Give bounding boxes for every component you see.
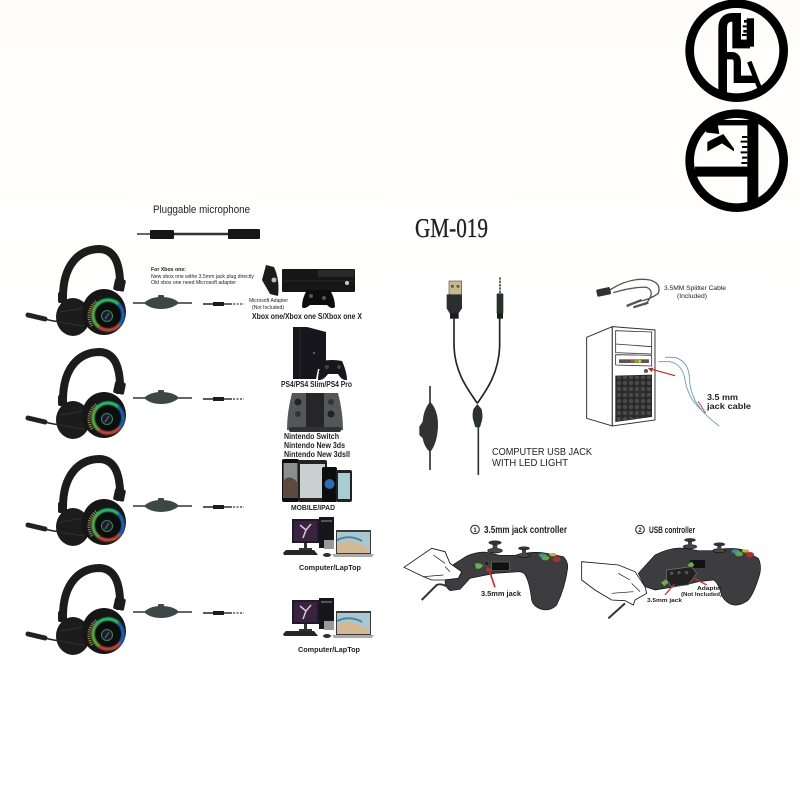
title: model number: GM-019 [415,213,488,243]
icon: headset [28,459,129,546]
icon: Xbox One console [282,269,355,292]
note: Xbox one compatibility: For Xbox one: [151,267,186,273]
icon: Nintendo Switch [287,393,343,432]
text: USB controller callouts [647,586,723,604]
icon: headset [28,352,129,439]
text: computer USB jack caption [492,447,592,469]
text: Microsoft adapter label: Microsoft Adapter [249,298,288,304]
text: splitter cable label: (Included) [677,293,707,300]
heading: USB controller: USB controller [649,525,695,536]
icon: inline control and plug [133,390,244,404]
label: mobile and iPad: MOBILE/IPAD [291,503,336,512]
label: Nintendo devices: Nintendo New 3dsll [284,450,350,459]
headset row 3: Mobile [28,459,244,546]
text: splitter cable label [664,285,726,300]
heading: USB controller: 2 [638,528,642,534]
icon: headset [28,249,129,336]
icon: computer tower with jack cable [587,327,719,426]
icon: inline control and plug [133,295,244,309]
label: Nintendo devices: Nintendo Switch [284,432,339,441]
heading: USB controller [636,525,695,536]
icon: inline control and plug [133,604,244,618]
label: computer and laptop: Computer/LapTop [299,563,361,572]
headset row 2: PlayStation [28,352,244,439]
icon: Xbox controller [302,290,335,308]
label: Nintendo devices [284,432,350,459]
headset row 1: Xbox [28,249,244,336]
icon: 3.5mm splitter cable [596,279,659,307]
text: Microsoft adapter label: (Not Included) [252,305,284,311]
text: USB controller callouts: 3.5mm jack [647,598,683,604]
icon: PS4 console [293,327,326,379]
icon: Microsoft adapter [262,265,278,296]
label: computer and laptop, second: Computer/LapTop [298,645,360,654]
logo: upper circular emblem [690,4,784,98]
text: 3.5 mm jack cable label: 3.5 mm [707,393,738,402]
icon: phones and tablets [282,459,352,502]
text: computer USB jack caption: COMPUTER USB JACK [492,447,592,458]
icon: pluggable microphone cable [137,229,260,239]
label: PS4 consoles: PS4/PS4 Slim/PS4 Pro [281,380,352,389]
icon: PS4 controller [318,360,347,380]
icon: inline control and plug [133,498,244,512]
text: Microsoft adapter label [249,298,288,311]
icon: desktop and laptop [283,517,374,557]
text: splitter cable label: 3.5MM Splitter Cable [664,285,726,292]
text: 3.5mm jack label: 3.5mm jack [481,591,521,598]
logo: lower circular emblem [690,114,784,208]
icon: desktop and laptop, second [283,598,374,638]
icon: USB and jack Y cable [419,277,503,475]
text: computer USB jack caption: WITH LED LIGHT [492,458,568,469]
diagram: USB controller [582,538,760,618]
note: Xbox one compatibility: New xbox one withe 3.5mm jack plug directly [151,274,254,280]
text: 3.5 mm jack cable label [706,393,752,411]
label: Xbox consoles: Xbox one/Xbox one S/Xbox one X [252,312,363,321]
icon: headset [28,568,129,655]
diagram: 3.5mm jack controller [404,541,568,610]
headset row 4: Computer [28,568,244,655]
text: USB controller callouts: (Not Included) [681,592,722,598]
note: Xbox one compatibility: Old xbox one need Microsoft adapter [151,280,236,286]
label: Nintendo devices: Nintendo New 3ds [284,441,345,450]
heading: 3.5mm jack controller: 3.5mm jack controller [484,525,567,536]
text: USB controller callouts: Adapter [697,586,723,592]
heading: pluggable microphone: Pluggable microphone [153,204,250,216]
heading: 3.5mm jack controller: 1 [473,528,477,534]
text: 3.5 mm jack cable label: jack cable [706,402,752,411]
note: Xbox one compatibility [151,267,254,286]
